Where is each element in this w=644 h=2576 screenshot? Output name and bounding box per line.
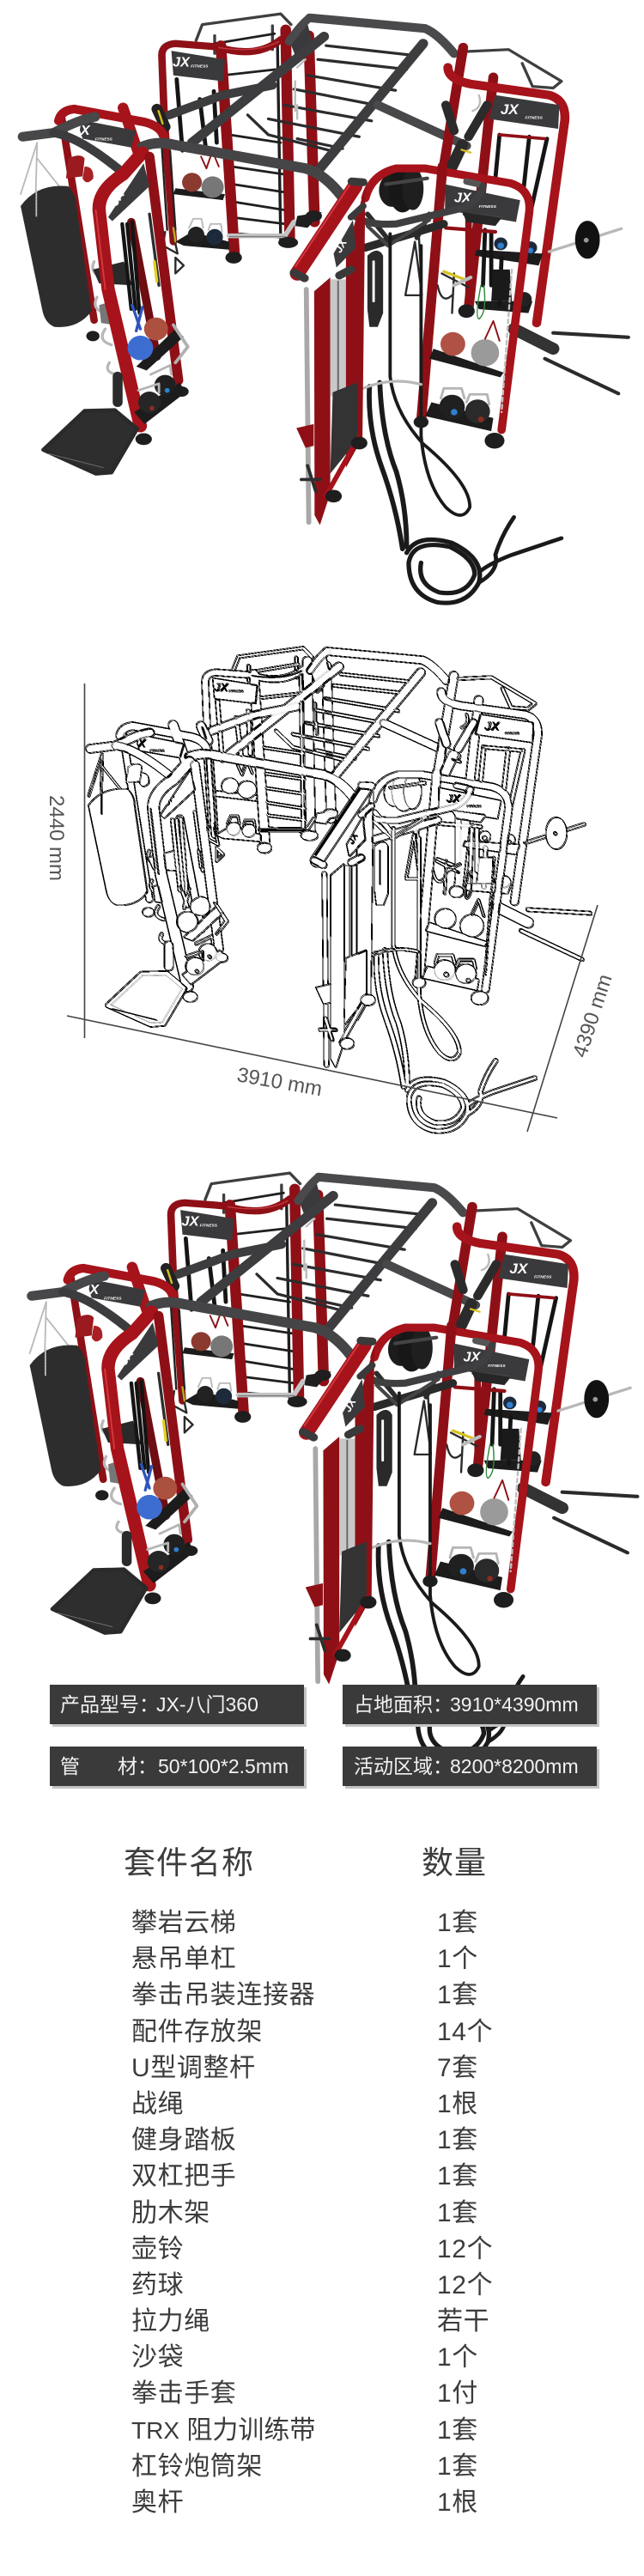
parts list: 1个: [437, 1945, 478, 1973]
parts list: 1套: [437, 2198, 478, 2227]
parts list: 若干: [437, 2307, 489, 2336]
photo: full 360 rig, top: JX: [106, 187, 129, 209]
rear centre rungs: [215, 33, 285, 238]
parts list: 1根: [437, 2090, 478, 2118]
outlined rig: [0, 610, 644, 1159]
photo: full 360 rig, top: FITNESS: [526, 116, 544, 119]
heading: part name: 套件名称: [124, 1845, 254, 1880]
central top bar: [143, 143, 344, 200]
photo: full 360 rig, top: JX: [331, 236, 350, 255]
lanyard + TRX: [405, 238, 422, 295]
parts list: 1套: [437, 1909, 478, 1937]
spec: footprint: [343, 1685, 597, 1724]
spec: model: [50, 1685, 304, 1724]
spec: tube: [50, 1747, 304, 1786]
parts list: [131, 1909, 493, 2517]
label: depth: 4390 mm: [568, 971, 617, 1060]
rear-left frame: [161, 39, 281, 242]
cloud ladder: [247, 46, 415, 150]
barbell: [549, 228, 622, 252]
right rear shelves: [475, 250, 543, 265]
parts list: 药球: [131, 2271, 184, 2300]
rear ladder rail: [196, 14, 562, 88]
front-right frame: [365, 168, 530, 430]
parts list: 攀岩云梯: [131, 1909, 236, 1937]
photo: full 360 rig, top: FITNESS: [191, 64, 209, 68]
right rear frame: [444, 47, 494, 309]
photo: full 360 rig, top: JX: [454, 191, 472, 205]
photo: full 360 rig, top: JX: [501, 101, 520, 118]
heading: quantity: 数量: [422, 1845, 487, 1880]
spec: active area: [343, 1747, 597, 1786]
parts list: 奥杆: [131, 2488, 184, 2517]
parts list: TRX 阻力训练带: [131, 2416, 315, 2445]
plates: [368, 214, 429, 242]
parts list: 1付: [437, 2379, 478, 2408]
punching bag: [21, 185, 92, 327]
parts list: 杠铃炮筒架: [131, 2452, 263, 2481]
spec: footprint: 占地面积：: [354, 1693, 453, 1716]
parts list: 健身踏板: [131, 2126, 236, 2154]
photo: full 360 rig, top: [17, 12, 630, 605]
front-left shelf back items: [93, 262, 118, 374]
battle ropes: [390, 234, 470, 515]
photo: full 360 rig, top: JX: [173, 55, 191, 70]
spec: footprint: 3910*4390mm: [450, 1693, 579, 1716]
parts list: 沙袋: [131, 2343, 184, 2372]
parts list: 壶铃: [131, 2235, 184, 2263]
parts list: 1个: [437, 2343, 478, 2372]
photo: full 360 rig, top: JX: [73, 123, 91, 138]
photo: full 360 rig, bottom: [27, 1171, 639, 1747]
parts list: 7套: [437, 2054, 478, 2082]
label: height: 2440 mm: [45, 795, 68, 881]
spec: active area: 活动区域：: [354, 1755, 453, 1777]
parts list: 1根: [437, 2488, 478, 2517]
parts list: 战绳: [131, 2090, 184, 2118]
boxing gloves: [66, 155, 85, 179]
dimension lines: [67, 683, 598, 1132]
spec: tube: 50*100*2.5mm: [158, 1755, 289, 1777]
parts list: 1套: [437, 2162, 478, 2190]
parts list: 肋木架: [131, 2198, 210, 2227]
parts list: U型调整杆: [131, 2054, 256, 2082]
spec: tube: 材：: [118, 1755, 157, 1777]
parts list: 拉力绳: [131, 2307, 210, 2336]
parts list: 拳击手套: [131, 2379, 236, 2408]
parts list: 14个: [437, 2018, 493, 2046]
cable column: [307, 289, 309, 522]
right shelves: [429, 349, 504, 377]
label: width: 3910 mm: [235, 1063, 324, 1101]
front-right frame back detail: [462, 202, 476, 309]
parts list: 12个: [437, 2235, 493, 2263]
parts list: 12个: [437, 2271, 493, 2300]
landmine stand: [514, 329, 553, 349]
photo: full 360 rig, top: FITNESS: [479, 204, 497, 209]
far-left frame: [62, 118, 94, 320]
punching bag chains: [21, 143, 74, 214]
spec: model: JX-八门360: [156, 1693, 258, 1716]
spec: active area: 8200*8200mm: [450, 1755, 579, 1777]
parts list: 1套: [437, 1981, 478, 2009]
parts list: 双杠把手: [131, 2162, 236, 2190]
spec: tube: 管: [60, 1755, 80, 1777]
line drawing with dimensions: [45, 646, 617, 1133]
front-left frame: [131, 222, 157, 356]
parts list: 悬吊单杠: [131, 1945, 236, 1973]
photo: full 360 rig, top: FITNESS: [95, 137, 113, 141]
parts list: 配件存放架: [131, 2018, 263, 2046]
rear shelves: [173, 188, 225, 200]
step platform: [43, 410, 137, 474]
parts list: 拳击吊装连接器: [131, 1981, 315, 2009]
spec: model: 产品型号：: [60, 1693, 159, 1716]
parts list: 1套: [437, 2126, 478, 2154]
parts list: 1套: [437, 2452, 478, 2481]
parts list: 1套: [437, 2416, 478, 2445]
